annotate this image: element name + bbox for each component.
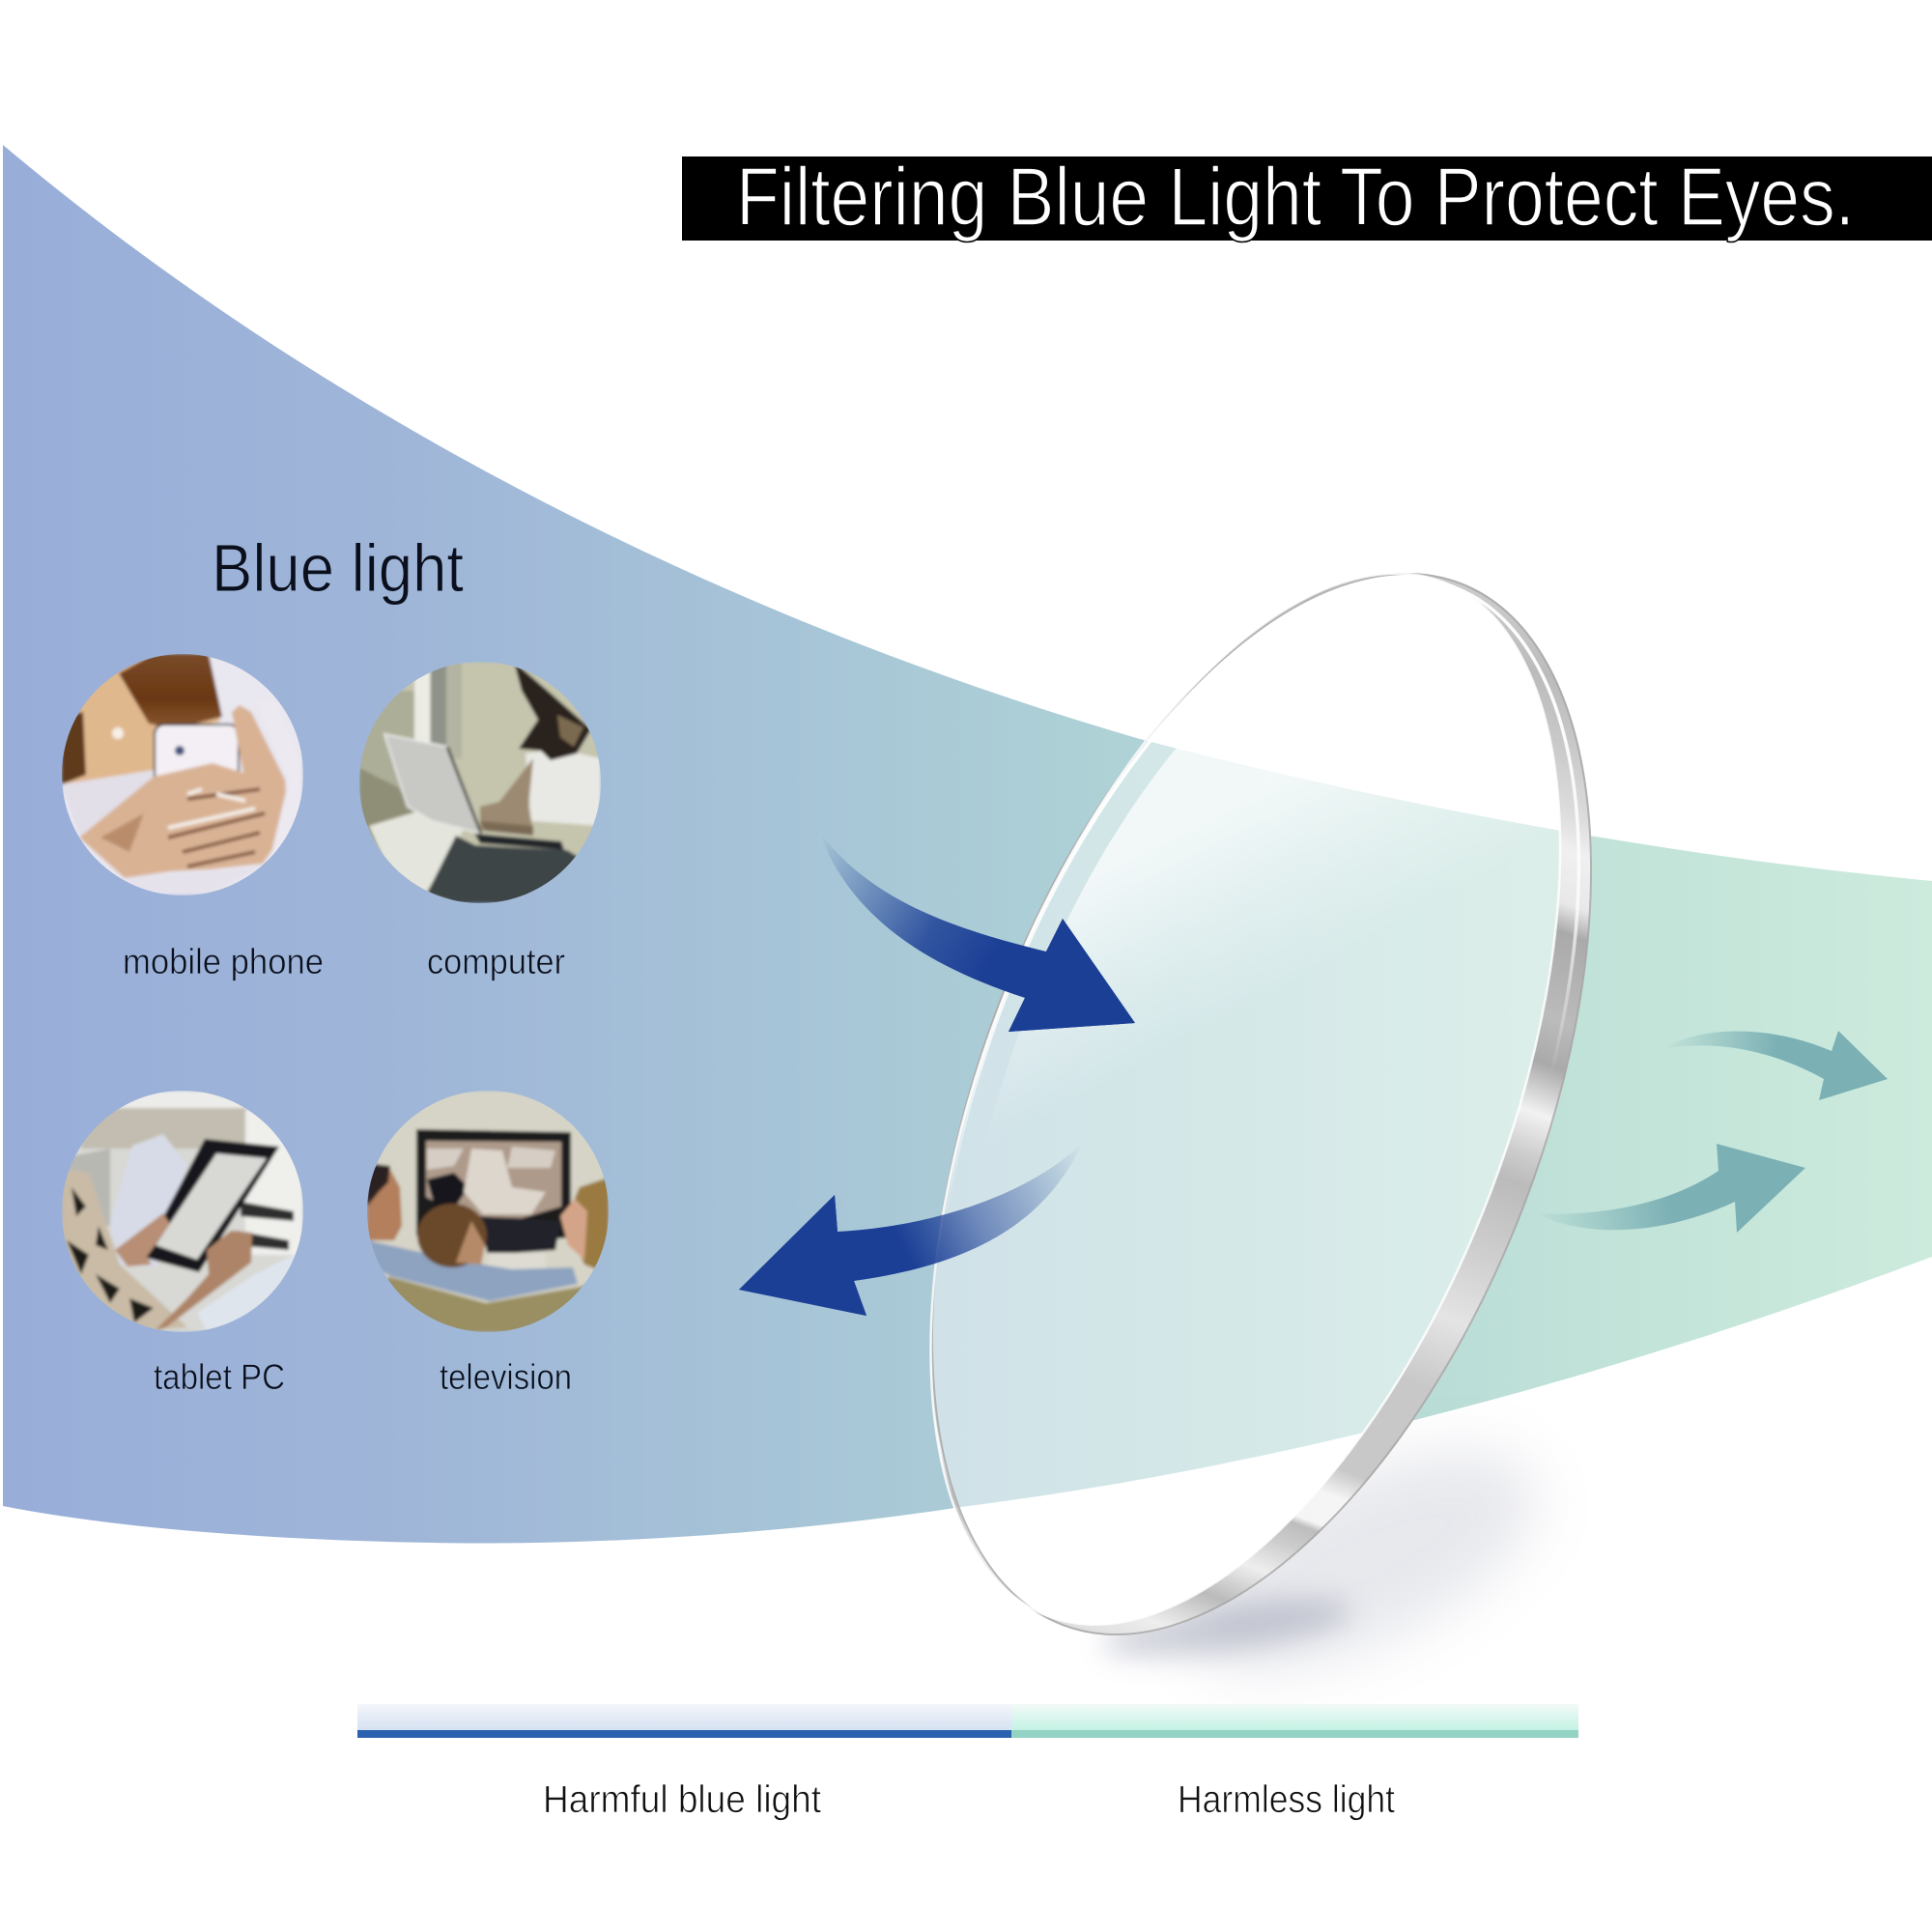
arrow: upper harmless light leaving lens [1662,1031,1888,1100]
lens [799,482,1724,1726]
lens glass [803,489,1688,1710]
arrow: blue light towards lens [819,832,1135,1032]
lens inner edge [803,489,1688,1710]
label: mobile phone: mobile phone [123,942,324,981]
label: television: television [440,1357,572,1397]
photo: television [367,1091,609,1332]
photo: computer [359,662,601,903]
lens highlight [839,526,1675,1680]
arrow: blue light reflected by lens [739,1144,1082,1316]
lens upper-left bevel [806,490,1708,1715]
photo: tablet PC [62,1091,303,1332]
lens rim [799,482,1724,1726]
lens shadow [1099,1442,1540,1679]
panel: blue-to-green light band [3,145,1932,1544]
photo: mobile phone [62,654,303,895]
label: harmless light: Harmless light [1178,1778,1395,1821]
lens outer edge [800,483,1723,1725]
legend bar [357,1704,1578,1738]
arrow: lower harmless light leaving lens [1534,1144,1805,1233]
label: harmful blue light: Harmful blue light [543,1778,821,1821]
label: tablet PC: tablet PC [154,1357,285,1397]
label: computer: computer [427,942,565,981]
heading: Blue light: Blue light [212,530,464,606]
